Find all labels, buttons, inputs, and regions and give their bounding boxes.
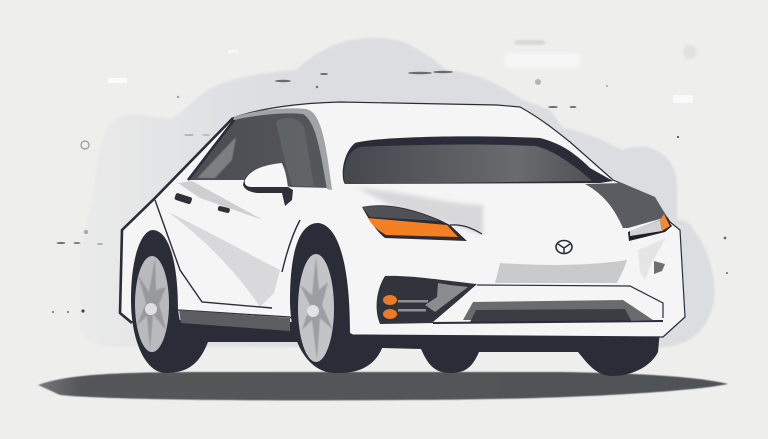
- right headlight: [628, 214, 672, 241]
- side window: [188, 108, 332, 190]
- door shading: [155, 181, 300, 308]
- door handles: [174, 193, 230, 213]
- rear wheel: [131, 230, 208, 373]
- dark hood panel at right: [585, 183, 667, 228]
- windshield: [343, 136, 613, 184]
- side air vent: [654, 261, 665, 274]
- front bumper intake: [433, 285, 663, 323]
- underbody and centre wheels: [175, 320, 660, 376]
- right fender shading: [638, 238, 666, 280]
- left body outline: [120, 118, 233, 323]
- background specks and dashes: [52, 40, 728, 313]
- smoke cloud behind car: [80, 38, 714, 347]
- ground shadow: [38, 372, 728, 400]
- hood shading: [357, 188, 483, 235]
- left headlight: [362, 205, 482, 241]
- side mirror: [243, 163, 293, 206]
- car body: [120, 102, 685, 337]
- grille panel on hood: [495, 260, 627, 283]
- fog light cluster: [377, 276, 477, 324]
- car badge: [556, 240, 572, 254]
- rocker sill: [179, 310, 290, 331]
- front wheel: [290, 223, 382, 373]
